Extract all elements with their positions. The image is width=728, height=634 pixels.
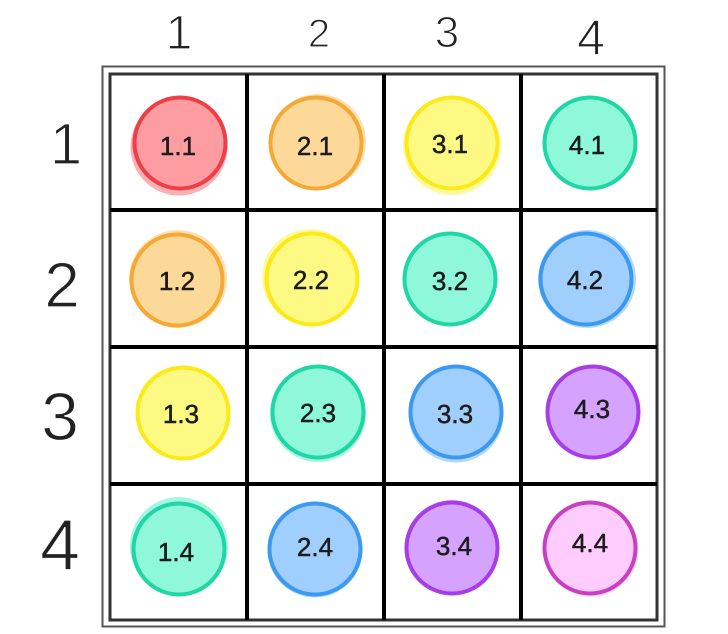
circle 4.2 bbox=[538, 230, 636, 328]
circle 3.4: 3.4 bbox=[436, 531, 472, 561]
circle 2.4 bbox=[268, 502, 362, 598]
circle 1.4: 1.4 bbox=[158, 537, 194, 567]
circle 3.4 bbox=[405, 500, 499, 594]
circle 1.4 bbox=[130, 497, 228, 595]
circle 4.1: 4.1 bbox=[569, 130, 605, 160]
circle 4.1 bbox=[543, 96, 637, 190]
circle 3.3 bbox=[408, 366, 504, 462]
circle 4.4 bbox=[544, 502, 638, 596]
circle 1.3: 1.3 bbox=[163, 399, 199, 429]
circle 2.2 bbox=[262, 229, 358, 325]
circle 1.2 bbox=[129, 230, 227, 328]
circle 2.1 bbox=[270, 94, 366, 190]
circle 2.3: 2.3 bbox=[300, 398, 336, 428]
circle 4.2: 4.2 bbox=[567, 265, 603, 295]
circle 3.2 bbox=[403, 232, 497, 326]
row headers: 1 bbox=[50, 112, 82, 177]
column headers: 4 bbox=[577, 10, 605, 66]
column headers: 3 bbox=[435, 8, 459, 57]
circle 1.1 bbox=[130, 98, 228, 196]
circle 3.2: 3.2 bbox=[432, 266, 468, 296]
grid frame bbox=[102, 66, 664, 626]
circle 1.1: 1.1 bbox=[160, 131, 196, 161]
column headers bbox=[166, 7, 605, 66]
row headers: 2 bbox=[44, 249, 80, 321]
row headers: 4 bbox=[40, 506, 80, 586]
circle 2.4: 2.4 bbox=[297, 532, 333, 562]
circle 4.4: 4.4 bbox=[572, 528, 608, 558]
circle 1.2: 1.2 bbox=[159, 266, 195, 296]
row headers: 3 bbox=[41, 379, 79, 455]
circle 3.3: 3.3 bbox=[437, 399, 473, 429]
column headers: 1 bbox=[166, 7, 192, 60]
column headers: 2 bbox=[308, 12, 330, 56]
circle 1.3 bbox=[136, 366, 230, 460]
circle 3.1: 3.1 bbox=[432, 129, 468, 159]
row headers bbox=[40, 112, 82, 586]
circle 3.1 bbox=[403, 97, 501, 195]
circle 2.2: 2.2 bbox=[293, 265, 329, 295]
circle 4.3: 4.3 bbox=[574, 394, 610, 424]
circle 2.3 bbox=[270, 366, 366, 462]
circle 4.3 bbox=[546, 365, 640, 459]
circle 2.1: 2.1 bbox=[297, 131, 333, 161]
